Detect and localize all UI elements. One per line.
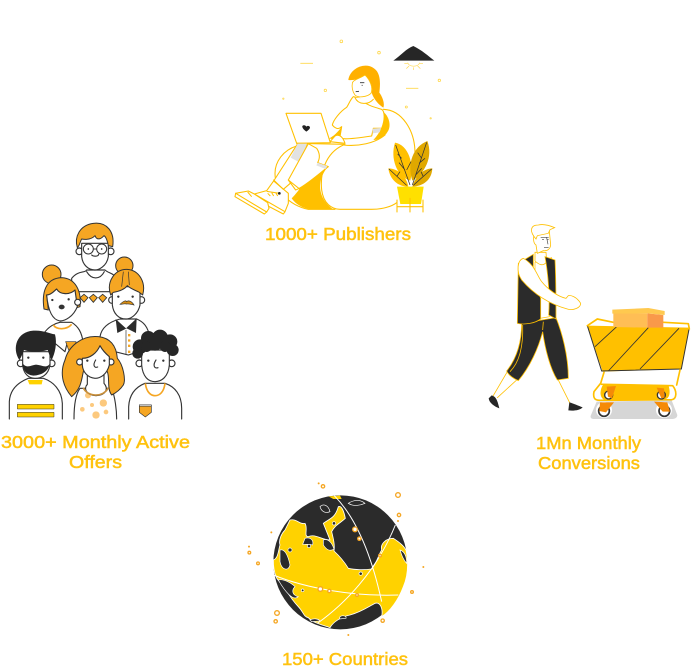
necklace band bbox=[80, 294, 107, 302]
cart shadow bbox=[591, 400, 677, 419]
lamp bbox=[393, 46, 434, 70]
illustration: man pushing shopping cart bbox=[489, 225, 689, 419]
box bbox=[612, 308, 665, 328]
route nodes bbox=[318, 527, 381, 596]
label: monthly active offers: Offers bbox=[69, 452, 122, 472]
sparkles bbox=[283, 40, 440, 119]
man with curly hair and pocket bbox=[129, 330, 182, 419]
cup pocket bbox=[66, 342, 76, 351]
legs and sneakers bbox=[235, 144, 328, 214]
globe sphere bbox=[273, 495, 407, 629]
laptop bbox=[286, 113, 345, 144]
label: monthly active offers: 3000+ Monthly Active bbox=[1, 432, 190, 452]
illustration: publisher woman with laptop on bean bag bbox=[235, 40, 440, 214]
illustration: group of people bbox=[9, 223, 182, 419]
flight paths bbox=[273, 496, 398, 623]
orbit dots bbox=[248, 482, 424, 636]
top man with glasses bbox=[72, 223, 115, 292]
walking man bbox=[489, 225, 583, 411]
dark bays on land bbox=[278, 500, 407, 622]
label: monthly conversions: 1Mn Monthly bbox=[536, 433, 641, 453]
shopping cart bbox=[587, 319, 689, 416]
illustration: globe bbox=[248, 482, 424, 636]
label: publishers: 1000+ Publishers bbox=[265, 224, 411, 244]
land masses bbox=[273, 496, 408, 628]
plant in pot bbox=[388, 141, 432, 212]
man with beard and striped sweater bbox=[9, 331, 62, 419]
bean bag bbox=[275, 109, 415, 209]
label: monthly conversions bbox=[536, 433, 641, 473]
label: monthly conversions: Conversions bbox=[538, 453, 640, 473]
woman with bun bbox=[42, 265, 83, 352]
label: monthly active offers bbox=[1, 432, 190, 472]
man with moustache and updo bbox=[100, 257, 150, 355]
woman with long wavy hair bbox=[62, 337, 124, 419]
woman bbox=[330, 66, 384, 143]
